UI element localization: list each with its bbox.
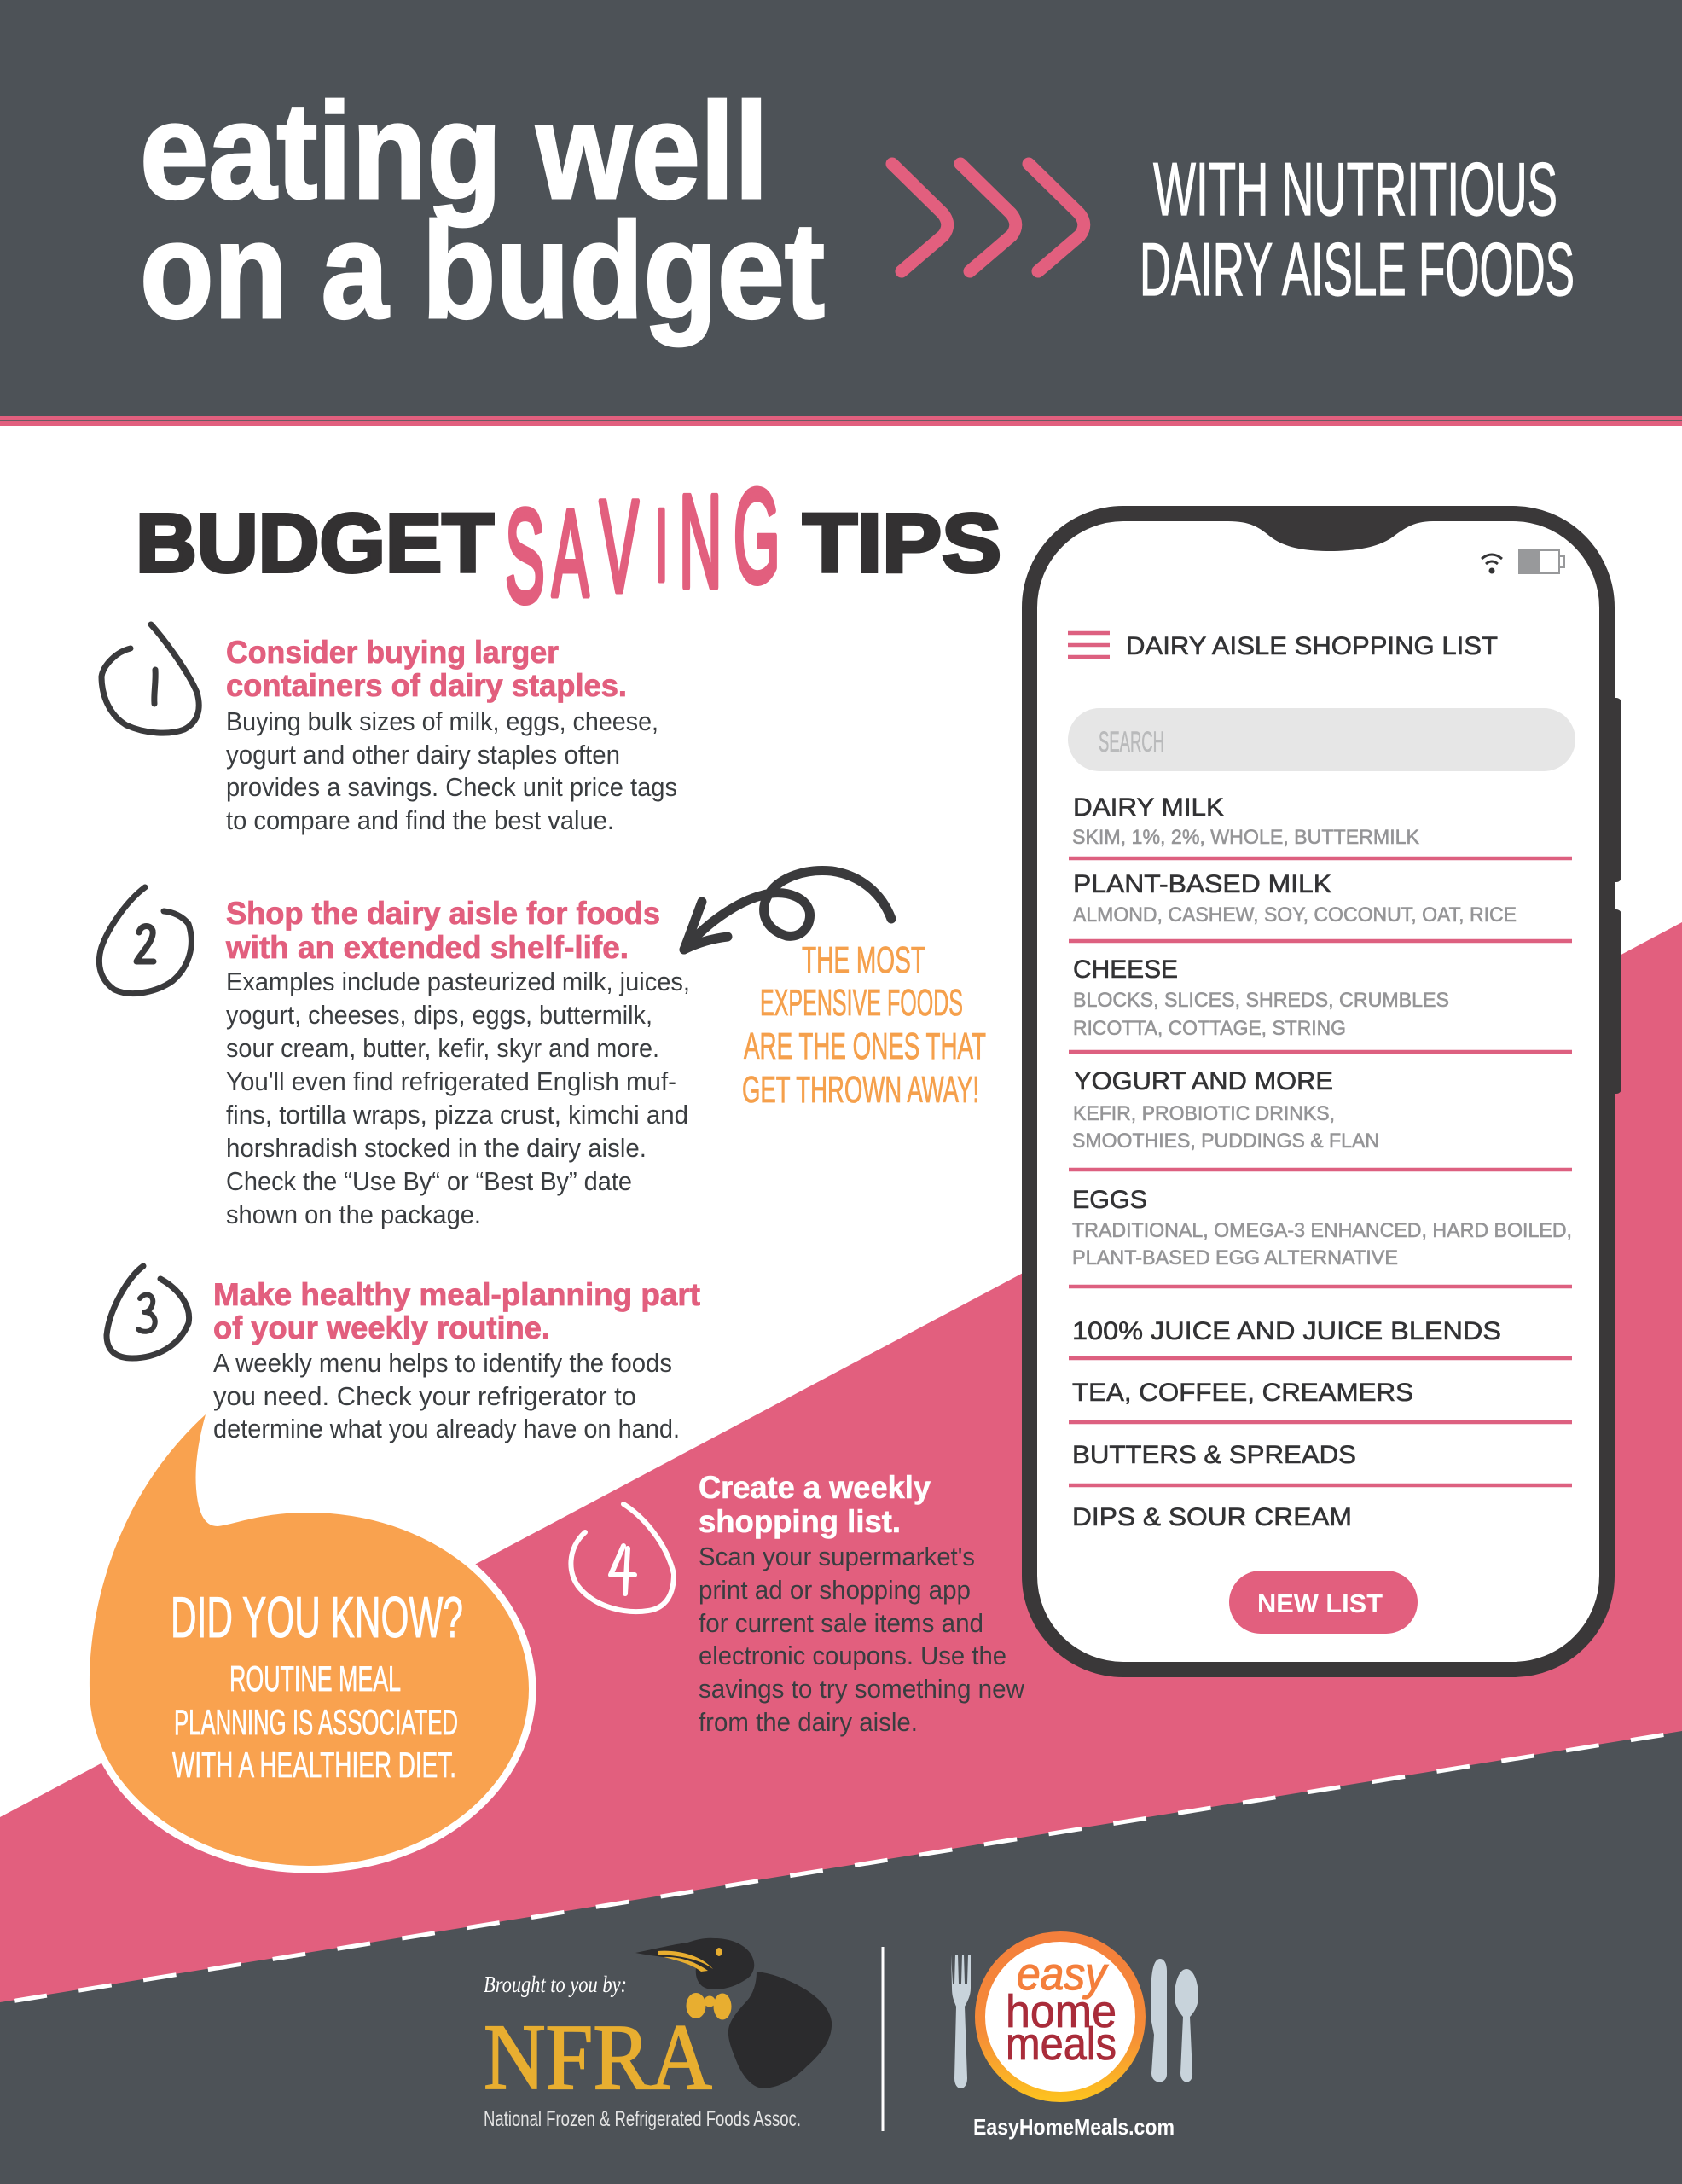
tip 3 text: you need. Check your refrigerator to (213, 1381, 636, 1411)
panel: header band (0, 0, 1682, 426)
heading: budget saving tips (136, 461, 1001, 630)
tip 2 text: sour cream, butter, kefir, skyr and more. (226, 1033, 659, 1063)
heading: budget saving tips: V (600, 474, 639, 620)
tip 2 text: yogurt, cheeses, dips, eggs, buttermilk, (226, 1000, 652, 1030)
list item: dairy milk: SKIM, 1%, 2%, WHOLE, BUTTERMILK (1072, 826, 1419, 849)
heading: budget saving tips: A (552, 485, 589, 622)
list item: plant-based milk: PLANT-BASED MILK (1073, 870, 1331, 898)
list item: butters and spreads: BUTTERS & SPREADS (1072, 1441, 1356, 1469)
penguin body (728, 1972, 832, 2088)
icon: number 1 hand-drawn circle (102, 624, 199, 733)
plate (980, 1937, 1140, 2097)
list item: cheese: CHEESE (1073, 956, 1178, 984)
button: new list: NEW LIST (1257, 1589, 1383, 1618)
tip 1 text: to compare and find the best value. (226, 805, 614, 835)
callout: orange note: ARE THE ONES THAT (744, 1025, 986, 1067)
brought to you by: Brought to you by: (484, 1972, 627, 1997)
tip 2 text: Check the “Use By“ or “Best By” date (226, 1166, 632, 1196)
tip 2 text: Shop the dairy aisle for foods (226, 896, 660, 931)
tip 2 text: Examples include pasteurized milk, juices, (226, 967, 690, 996)
tip 1 text (226, 635, 677, 835)
list item: eggs: TRADITIONAL, OMEGA-3 ENHANCED, HARD BOILED, (1072, 1219, 1572, 1242)
phone body (1030, 514, 1607, 1670)
tip 2 text: You'll even find refrigerated English muf- (226, 1066, 676, 1096)
list item: yogurt and more: YOGURT AND MORE (1074, 1067, 1333, 1095)
list item: yogurt and more: SMOOTHIES, PUDDINGS & FLAN (1072, 1130, 1379, 1153)
list item: eggs: EGGS (1072, 1186, 1147, 1214)
callout: did you know speech bubble: ROUTINE MEAL (229, 1658, 401, 1699)
tip 3 text (213, 1277, 700, 1443)
list item: plant-based milk (1073, 870, 1517, 926)
list item: eggs: PLANT-BASED EGG ALTERNATIVE (1072, 1246, 1398, 1269)
tip 4 text (699, 1470, 1025, 1737)
tip 2 text: fins, tortilla wraps, pizza crust, kimchi and (226, 1100, 688, 1130)
title: on a budget (140, 194, 825, 346)
list item: dips and sour cream: DIPS & SOUR CREAM (1072, 1503, 1352, 1531)
search bar: SEARCH (1099, 726, 1164, 758)
logo wordmark (1006, 1949, 1116, 2070)
tip 1 text: provides a savings. Check unit price tags (226, 772, 677, 802)
logo wordmark: home (1006, 1986, 1116, 2037)
title: eating well (140, 74, 768, 227)
icon: battery (1519, 550, 1564, 573)
icon: hamburger menu (1068, 633, 1110, 657)
tip 4 text: electronic coupons. Use the (699, 1641, 1006, 1670)
callout: orange note: GET THROWN AWAY! (742, 1069, 979, 1111)
heading: budget saving tips: N (679, 468, 722, 616)
button: new list (1229, 1571, 1418, 1634)
arrow: curly arrow pointing to tip 2 (684, 870, 891, 950)
tip 1 text: Consider buying larger (226, 635, 559, 670)
logo divider (882, 1947, 884, 2131)
icon: number 4 hand-drawn circle (571, 1504, 674, 1612)
tip 2 text (225, 896, 690, 1229)
callout: did you know speech bubble: PLANNING IS ASSOCIATED (174, 1702, 458, 1742)
association name: National Frozen & Refrigerated Foods Assoc. (484, 2107, 801, 2131)
tip 3 text: A weekly menu helps to identify the foods (213, 1348, 672, 1378)
tip 1 text: containers of dairy staples. (226, 668, 627, 703)
tip 3 text: determine what you already have on hand. (213, 1414, 680, 1443)
tip 4 text: Create a weekly (699, 1470, 931, 1505)
heading: budget saving tips: S (505, 483, 545, 630)
icon: number 3 hand-drawn circle (107, 1266, 189, 1358)
title (140, 74, 825, 346)
search bar (1068, 708, 1575, 771)
tip 4 text: for current sale items and (699, 1608, 983, 1638)
callout: did you know speech bubble: DID YOU KNOW? (171, 1585, 463, 1650)
logo: NFRA penguin (484, 1938, 832, 2131)
list item: cheese: RICOTTA, COTTAGE, STRING (1073, 1017, 1346, 1040)
panel: phone shopping list (1030, 512, 1621, 1670)
tip 4 text: Scan your supermarket's (699, 1542, 975, 1571)
heading: budget saving tips: BUDGET (136, 497, 494, 590)
tip 2 text: horshradish stocked in the dairy aisle. (226, 1133, 647, 1163)
list item: dairy milk: DAIRY MILK (1073, 793, 1224, 822)
heading: budget saving tips: I (655, 488, 668, 602)
tip 4 text: savings to try something new (699, 1674, 1025, 1704)
penguin head (635, 1938, 754, 1989)
website: EasyHomeMeals.com (973, 2114, 1174, 2140)
tip 1 text: yogurt and other dairy staples often (226, 740, 620, 770)
tip 4 text: shopping list. (699, 1504, 901, 1539)
logo: easy home meals (951, 1937, 1198, 2140)
phone heading: DAIRY AISLE SHOPPING LIST (1126, 632, 1498, 660)
tip 2 text: with an extended shelf-life. (225, 930, 629, 965)
heading: budget saving tips: TIPS (803, 497, 1001, 590)
icon: triple chevron arrows (892, 164, 1084, 271)
phone notch (1171, 512, 1508, 551)
tip 4 text: print ad or shopping app (699, 1575, 971, 1605)
logo wordmark: meals (1006, 2018, 1116, 2070)
list item: tea coffee creamers: TEA, COFFEE, CREAMERS (1072, 1379, 1413, 1407)
dashed white edge line (0, 1732, 1682, 2003)
tip 1 text: Buying bulk sizes of milk, eggs, cheese, (226, 706, 658, 736)
logo wordmark: easy (1017, 1949, 1109, 2000)
icon: number 2 hand-drawn circle (99, 887, 191, 994)
panel: diagonal pink band (0, 922, 1682, 2013)
penguin beak stripes and eye (658, 1948, 722, 1972)
list item: yogurt and more (1072, 1067, 1379, 1153)
heading: budget saving tips: G (734, 461, 780, 611)
callout: did you know speech bubble (90, 1414, 529, 1866)
tip 2 text: shown on the package. (226, 1199, 481, 1229)
list item: yogurt and more: KEFIR, PROBIOTIC DRINKS, (1073, 1102, 1335, 1125)
panel: bottom dark footer band (0, 1731, 1682, 2184)
icon: wifi (1482, 555, 1502, 573)
list item: dairy milk (1072, 793, 1419, 849)
phone side buttons (1610, 698, 1621, 1094)
icon: spoon (1174, 1969, 1198, 2082)
callout: did you know speech bubble: WITH A HEALTHIER DIET. (172, 1745, 456, 1785)
icon: fork (951, 1955, 971, 2088)
list item: plant-based milk: ALMOND, CASHEW, SOY, COCONUT, OAT, RICE (1073, 903, 1517, 926)
list item: juice: 100% JUICE AND JUICE BLENDS (1072, 1317, 1501, 1345)
callout: orange note (742, 939, 986, 1111)
NFRA wordmark: NFRA (484, 2005, 712, 2109)
tip 3 text: of your weekly routine. (213, 1310, 550, 1345)
list item: eggs (1072, 1186, 1572, 1269)
list item: cheese: BLOCKS, SLICES, SHREDS, CRUMBLES (1073, 989, 1449, 1012)
tip 3 text: Make healthy meal-planning part (213, 1277, 700, 1312)
callout: orange note: THE MOST (802, 939, 925, 981)
subtitle (1140, 147, 1575, 311)
penguin bow tie (686, 1993, 732, 2020)
icon: knife (1151, 1959, 1167, 2082)
tip 4 text: from the dairy aisle. (699, 1707, 918, 1737)
callout: orange note: EXPENSIVE FOODS (760, 982, 963, 1024)
list item: cheese (1073, 956, 1449, 1040)
